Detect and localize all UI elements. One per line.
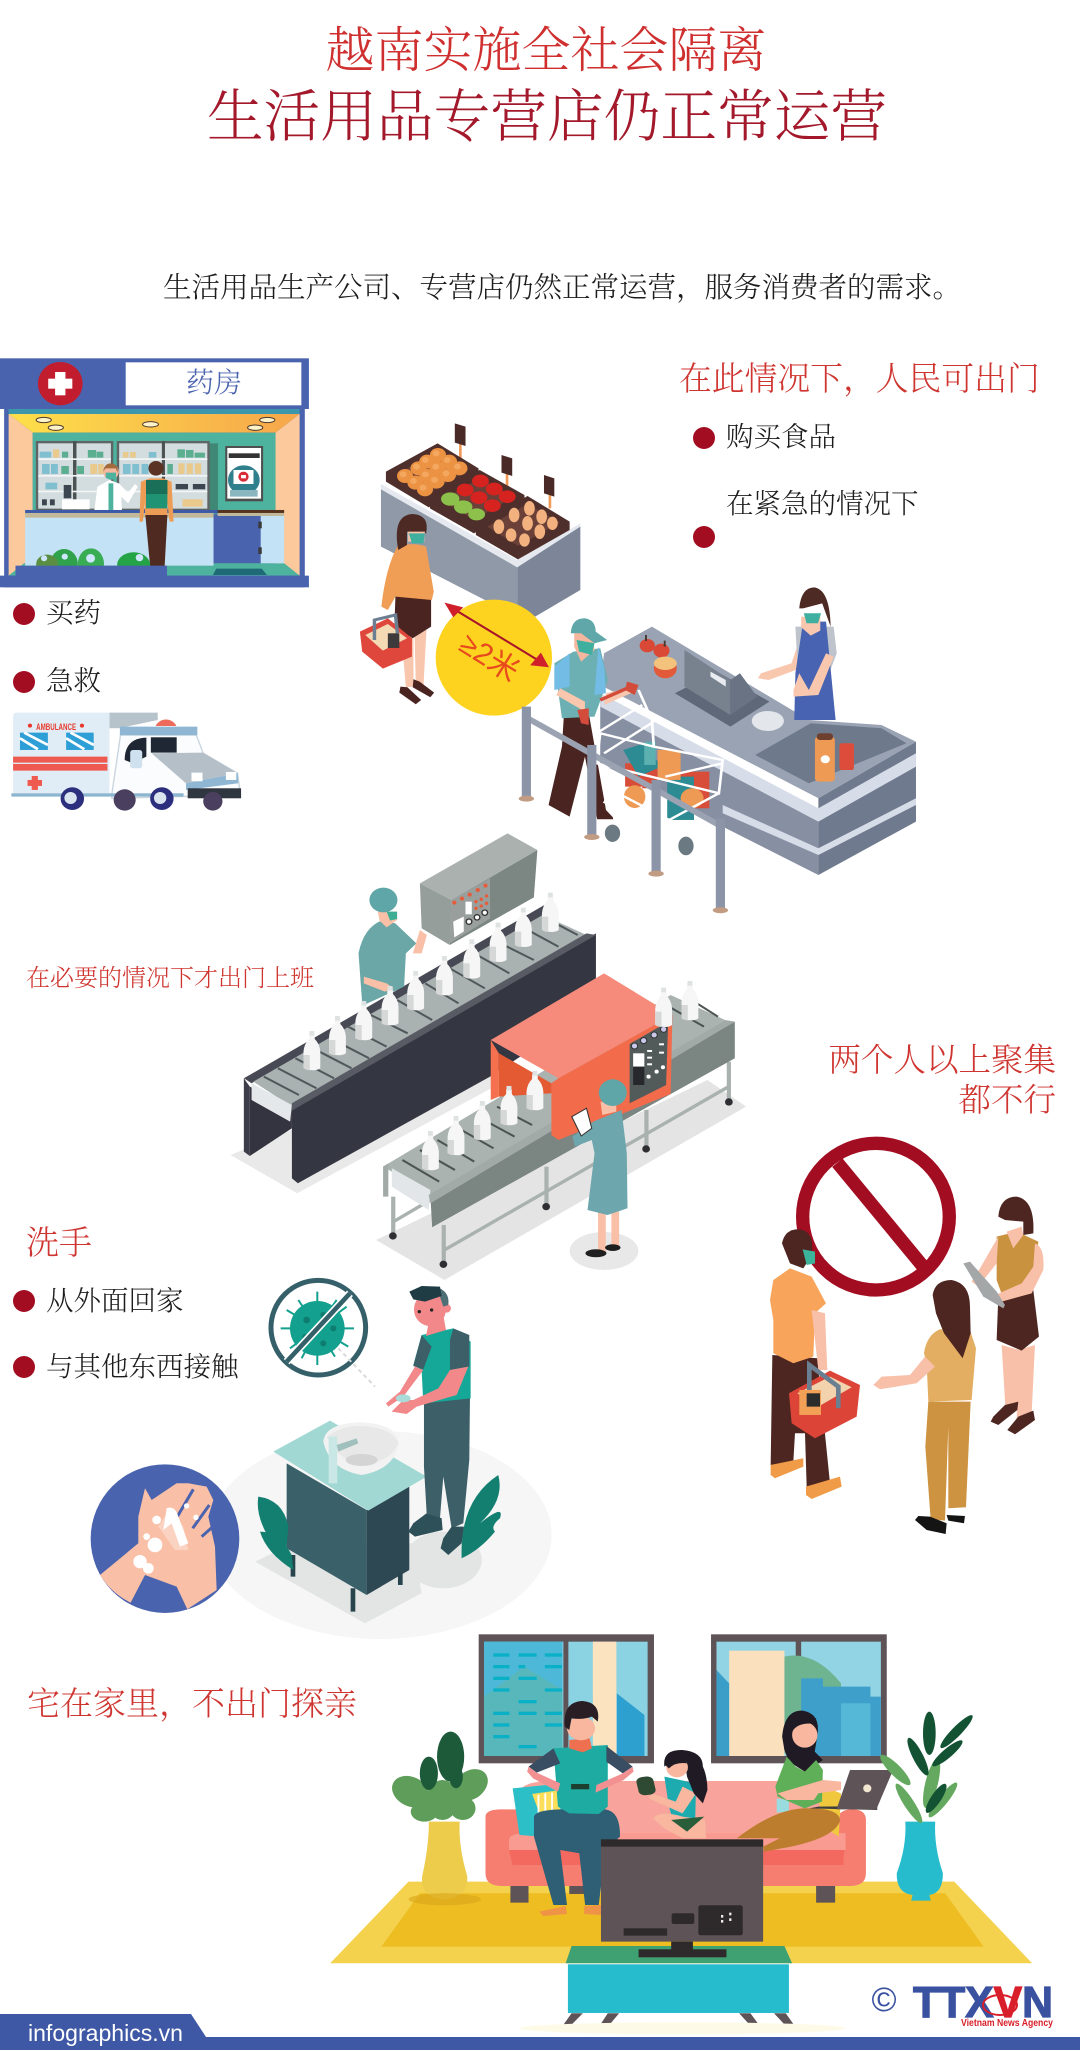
yellow 2 metre circle (436, 600, 552, 716)
price signs (455, 423, 554, 508)
medicine shelves (36, 441, 210, 510)
heading: no gatherings: 都不行 (958, 1082, 1056, 1119)
woman in yellow (873, 1280, 976, 1534)
bullet: coming home: 从外面回家 (46, 1285, 184, 1316)
red inspection machine (491, 973, 672, 1140)
floor shadow back conveyor (231, 1047, 501, 1193)
front conveyor (383, 995, 735, 1268)
daughter (635, 1750, 707, 1838)
checkout counter (600, 627, 916, 875)
bullet: first aid: 急救 (46, 665, 101, 696)
floor ellipse (208, 1431, 552, 1639)
crates of fruit (386, 443, 570, 559)
distance label: ≥2米 (454, 627, 525, 689)
man with basket (770, 1229, 860, 1499)
customer in pharmacy (139, 461, 174, 567)
heading: no gatherings: 两个人以上聚集 (828, 1042, 1056, 1079)
front conveyor bottles (422, 981, 698, 1170)
panel: family living room (330, 1634, 1032, 2034)
floor shadow front conveyor (376, 1080, 746, 1280)
bullet: first aid (13, 665, 101, 696)
bullet: buy food: 购买食品 (726, 421, 836, 452)
back conveyor (244, 905, 596, 1183)
bullet: touching objects: 与其他东西接触 (46, 1351, 239, 1382)
sofa (485, 1781, 866, 1903)
icon: soapy hands (91, 1464, 239, 1613)
panel: hand washing illustration (91, 1280, 552, 1639)
heading: no gatherings (828, 1042, 1056, 1119)
shopping cart (596, 690, 723, 855)
bullet: buy medicine (13, 597, 101, 628)
right plant (876, 1712, 977, 1901)
apples and can (640, 635, 677, 678)
title: 越南实施全社会隔离 (325, 23, 767, 78)
plants (36, 548, 150, 580)
mother with laptop (737, 1711, 893, 1852)
woman with tablet (963, 1197, 1044, 1434)
plants beside sink (258, 1475, 501, 1570)
queue barrier (519, 707, 728, 913)
inspector woman (570, 1079, 638, 1270)
windows (479, 1634, 887, 1763)
bullet: buy medicine: 买药 (46, 597, 101, 628)
pharmacist (62, 463, 138, 510)
tv stand (519, 1946, 846, 2034)
man washing hands (386, 1286, 471, 1555)
heading: stay home: 宅在家里，不出门探亲 (27, 1686, 357, 1723)
intro text: 生活用品生产公司、专营店仍然正常运营，服务消费者的需求。 (163, 272, 961, 304)
counter (25, 510, 284, 575)
cushions (513, 1783, 841, 1837)
ceiling lamps (36, 417, 275, 430)
heading: wash hands: 洗手 (26, 1225, 92, 1262)
filling machine with worker (359, 833, 537, 1005)
title (207, 23, 887, 149)
footer bar (0, 2014, 1080, 2050)
customer with cart (549, 618, 639, 819)
bullet: emergencies: 在紧急的情况下 (726, 488, 918, 519)
tv (601, 1839, 763, 1957)
back conveyor bottles (303, 893, 559, 1070)
heading: people may go out: 在此情况下，人民可出门 (679, 361, 1040, 398)
panel: supermarket scene (360, 423, 916, 913)
logo: TTXVN: © (871, 1981, 897, 2019)
cash register (675, 650, 784, 731)
pharmacy sign board (0, 358, 309, 409)
logo: TTXVN: Vietnam News Agency (961, 2017, 1053, 2029)
panel: no gathering illustration (770, 1143, 1044, 1534)
panel: pharmacy storefront (0, 358, 309, 587)
icon: ambulance (11, 713, 241, 811)
icon: ambulance: AMBULANCE (36, 722, 76, 733)
shopper woman with basket (360, 514, 434, 704)
pharmacy label: 药房 (186, 367, 242, 399)
icon: no virus (271, 1280, 375, 1387)
left plant (385, 1732, 494, 1905)
text: go to work only if necessary: 在必要的情况下才出门上班 (26, 965, 314, 992)
fruit stand (381, 423, 580, 617)
pharmacy poster (225, 446, 263, 501)
father (527, 1701, 634, 1916)
cashier woman (758, 587, 837, 720)
bullet: emergencies (693, 488, 918, 548)
panel: factory conveyors (231, 833, 746, 1280)
footer bar: infographics.vn (28, 2020, 183, 2046)
rug (330, 1882, 1032, 1963)
bottles on counter (815, 733, 854, 782)
sink cabinet (273, 1421, 427, 1612)
title: 生活用品专营店仍正常运营 (207, 86, 887, 149)
logo: TTXVN: TTXVN (913, 1978, 1053, 2027)
icon: prohibition sign (803, 1143, 949, 1290)
